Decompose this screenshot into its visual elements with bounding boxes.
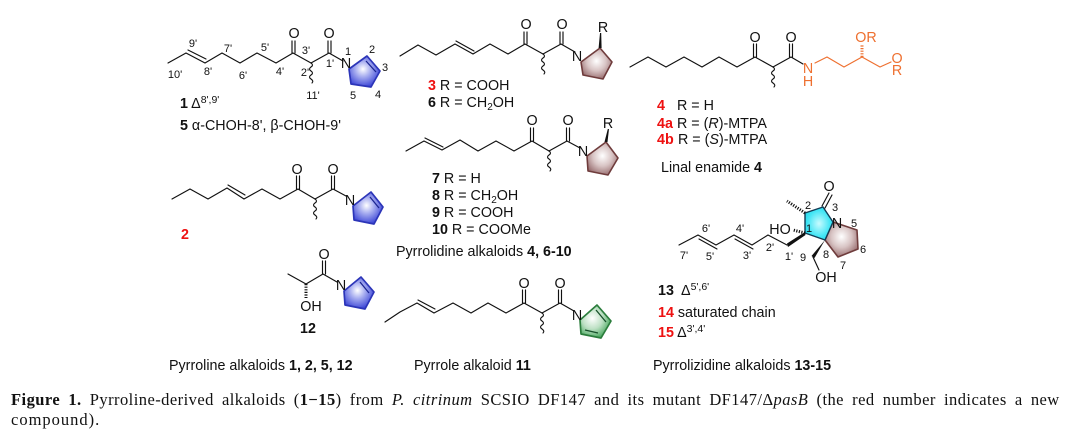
atom labels: 6: [860, 244, 866, 256]
compound 8 label: OH: [497, 188, 518, 204]
atom labels: N: [572, 308, 582, 324]
atom labels: N: [336, 278, 346, 294]
fatty chain: [385, 303, 574, 322]
atom labels: [680, 179, 866, 286]
ring double bond: [360, 282, 369, 293]
compound 4 label: R = H: [677, 98, 714, 114]
pyrroline ring: [353, 192, 383, 224]
compound 1 structure: [168, 26, 388, 102]
chain double bond: [228, 185, 245, 195]
atom labels: 5: [350, 90, 356, 102]
dashed hydroxyl bond: [793, 230, 805, 233]
atom labels: OR: [855, 30, 877, 46]
compound 4b label: R = (: [678, 132, 710, 148]
compound 12 structure: [288, 247, 374, 315]
atom labels: O: [554, 276, 566, 292]
dashed methyl: [787, 201, 805, 213]
stereo wedge: [604, 129, 609, 142]
hydroxymethyl bond: [813, 257, 819, 270]
atom labels: O: [318, 247, 330, 263]
atom labels: 6': [702, 223, 710, 235]
atom labels: N: [832, 216, 842, 232]
atom labels: 4': [276, 66, 284, 78]
side chain: [288, 274, 337, 284]
compound 13 label: 5',6': [691, 281, 709, 293]
atom labels: 8': [204, 66, 212, 78]
wavy methyl: [542, 54, 545, 74]
pyrrolizidine heading: Pyrrolizidine alkaloids 13-15: [653, 358, 831, 374]
atom labels: [526, 113, 613, 160]
ring double bond: [366, 61, 376, 72]
compound 14 label: 14 saturated chain: [658, 305, 776, 321]
carbonyl groups: [524, 32, 563, 44]
atom labels: [300, 247, 346, 315]
atom labels: N: [572, 49, 582, 65]
carbonyl: [822, 193, 832, 208]
atom labels: HO: [769, 222, 791, 238]
wavy methyl: [314, 199, 317, 219]
wavy methyl: [540, 313, 544, 333]
fatty chain: [679, 235, 787, 245]
atom labels: [518, 276, 582, 324]
compound 7-10 structure: [406, 113, 618, 175]
atom labels: N: [578, 144, 588, 160]
wavy methyl: [310, 63, 313, 83]
atom labels: 3: [382, 62, 388, 74]
atom labels: 11': [306, 90, 320, 102]
atom labels: 1': [785, 251, 793, 263]
compound 4 structure: [630, 30, 903, 90]
atom labels: O: [291, 162, 303, 178]
atom labels: 3: [832, 202, 838, 214]
compound 8 label: 2: [491, 195, 497, 206]
dashed stereo bond: [304, 284, 308, 298]
dashed stereo bond: [860, 44, 864, 57]
atom labels: [291, 162, 355, 209]
stereo wedge: [599, 33, 602, 48]
compound 9 label: 9 R = COOH: [432, 205, 513, 221]
cyan ring: [805, 207, 833, 240]
atom labels: 5': [706, 251, 714, 263]
atom labels: R: [603, 116, 613, 132]
compound 8 label: 8 R = CH: [432, 188, 491, 204]
atom labels: O: [556, 17, 568, 33]
atom labels: O: [323, 26, 335, 42]
figure caption: Figure 1. Pyrroline-derived alkaloids (1−15) from P. citrinum SCSIO DF147 and its mutant DF147/ΔpasB (the red number indicates a new: [11, 390, 1060, 409]
atom labels: 6': [239, 70, 247, 82]
atom labels: 4: [375, 89, 381, 101]
compound 6 label: 6 R = CH: [428, 95, 487, 111]
atom labels: 7': [224, 43, 232, 55]
compound 6 label: 2: [487, 102, 493, 113]
ring double bonds: [585, 310, 606, 333]
carbonyl group: [322, 261, 326, 274]
compound 1 label: 1 Δ: [180, 96, 201, 112]
compound 7 label: 7 R = H: [432, 171, 481, 187]
compound 15 label: 3',4': [687, 323, 705, 335]
chain double bonds: [699, 239, 753, 249]
chain double bond: [425, 138, 443, 147]
carbonyl groups: [530, 128, 570, 141]
compound 2 structure: [172, 162, 383, 224]
carbonyl groups: [522, 290, 562, 303]
atom labels: 2': [766, 242, 774, 254]
pyrrolidine ring: [587, 142, 618, 175]
fatty chain: [400, 44, 575, 56]
wavy methyl: [772, 67, 775, 87]
compound 3 label: 3 R = COOH: [428, 78, 509, 94]
pyrrolidine ring: [581, 48, 612, 79]
figure caption: [11, 390, 1060, 429]
ring double bond: [370, 197, 379, 208]
atom labels: [168, 26, 388, 102]
atom labels: 7': [680, 250, 688, 262]
figure caption: compound).: [11, 410, 100, 429]
carbonyl groups: [754, 44, 792, 57]
compound 4a label: 4a: [657, 116, 674, 132]
fatty chain: [172, 188, 346, 199]
compound 4 label: 4: [657, 98, 665, 114]
bold wedges: [787, 232, 806, 247]
compound 2 label: 2: [181, 227, 189, 243]
pyrroline ring: [344, 277, 374, 309]
compound 4a label: R)-MTPA: [708, 116, 767, 132]
compound 13 structure: [679, 179, 866, 286]
atom labels: O: [562, 113, 574, 129]
compound 4b label: 4b: [657, 132, 674, 148]
carbonyl groups: [292, 41, 331, 53]
fatty chain: [168, 53, 343, 63]
linal enamide heading: Linal enamide 4: [661, 160, 762, 176]
compound 10 label: 10 R = COOMe: [432, 222, 531, 238]
atom labels: OH: [300, 299, 322, 315]
atom labels: 1: [345, 46, 351, 58]
brown ring: [825, 222, 858, 257]
compound 13 label: 13: [658, 283, 674, 299]
atom labels: 1': [326, 58, 334, 70]
atom labels: 4': [736, 223, 744, 235]
atom labels: 5': [261, 42, 269, 54]
atom labels: N: [341, 56, 351, 72]
atom labels: N: [345, 193, 355, 209]
compound 5 label: 5 α-CHOH-8', β-CHOH-9': [180, 118, 341, 134]
chain double bond: [456, 41, 474, 51]
atom labels: R: [598, 20, 608, 36]
wavy methyl: [548, 151, 551, 171]
compound 13 label: Δ: [681, 283, 691, 299]
atom labels: 2: [369, 44, 375, 56]
atom labels: 3': [743, 250, 751, 262]
compound 11 structure: [385, 276, 611, 338]
atom labels: O: [891, 51, 903, 67]
compound 15 label: 15 Δ: [658, 325, 687, 341]
atom labels: OH: [815, 270, 837, 286]
atom labels: O: [288, 26, 300, 42]
atom labels: 7: [840, 260, 846, 272]
atom labels: 1: [806, 223, 812, 235]
compound 6 label: OH: [493, 95, 514, 111]
compound 3/6 structure: [400, 17, 612, 79]
compound 12 label: 12: [300, 321, 316, 337]
chain double bond: [188, 50, 206, 59]
atom labels: H: [803, 74, 813, 90]
atom labels: 9': [189, 38, 197, 50]
atom labels: O: [518, 276, 530, 292]
atom labels: 5: [851, 218, 857, 230]
atom labels: 9: [800, 252, 806, 264]
compound 4b label: S)-MTPA: [709, 132, 767, 148]
carbonyl groups: [296, 176, 334, 189]
fatty chain: [406, 140, 580, 151]
orange amine side chain: [815, 57, 891, 67]
atom labels: 2: [805, 200, 811, 212]
compound 4a label: R = (: [677, 116, 709, 132]
atom labels: 3': [302, 45, 310, 57]
atom labels: R: [892, 63, 902, 79]
atom labels: O: [526, 113, 538, 129]
atom labels: 2': [301, 67, 309, 79]
compound 1 label: 8',9': [201, 94, 219, 106]
chain double bond: [418, 300, 435, 309]
atom labels: O: [520, 17, 532, 33]
atom labels: N: [803, 61, 813, 77]
atom labels: O: [823, 179, 835, 195]
pyrrole heading: Pyrrole alkaloid 11: [414, 358, 531, 374]
pyrroline heading: Pyrroline alkaloids 1, 2, 5, 12: [169, 358, 353, 374]
atom labels: O: [327, 162, 339, 178]
pyrrolidine heading: Pyrrolidine alkaloids 4, 6-10: [396, 244, 572, 260]
pyrroline ring: [349, 56, 380, 87]
atom labels: [749, 30, 903, 90]
atom labels: 10': [168, 69, 182, 81]
atom labels: O: [749, 30, 761, 46]
atom labels: 8: [823, 249, 829, 261]
pyrrole ring: [580, 305, 611, 338]
fatty chain: [630, 57, 803, 67]
atom labels: O: [785, 30, 797, 46]
atom labels: [520, 17, 608, 65]
